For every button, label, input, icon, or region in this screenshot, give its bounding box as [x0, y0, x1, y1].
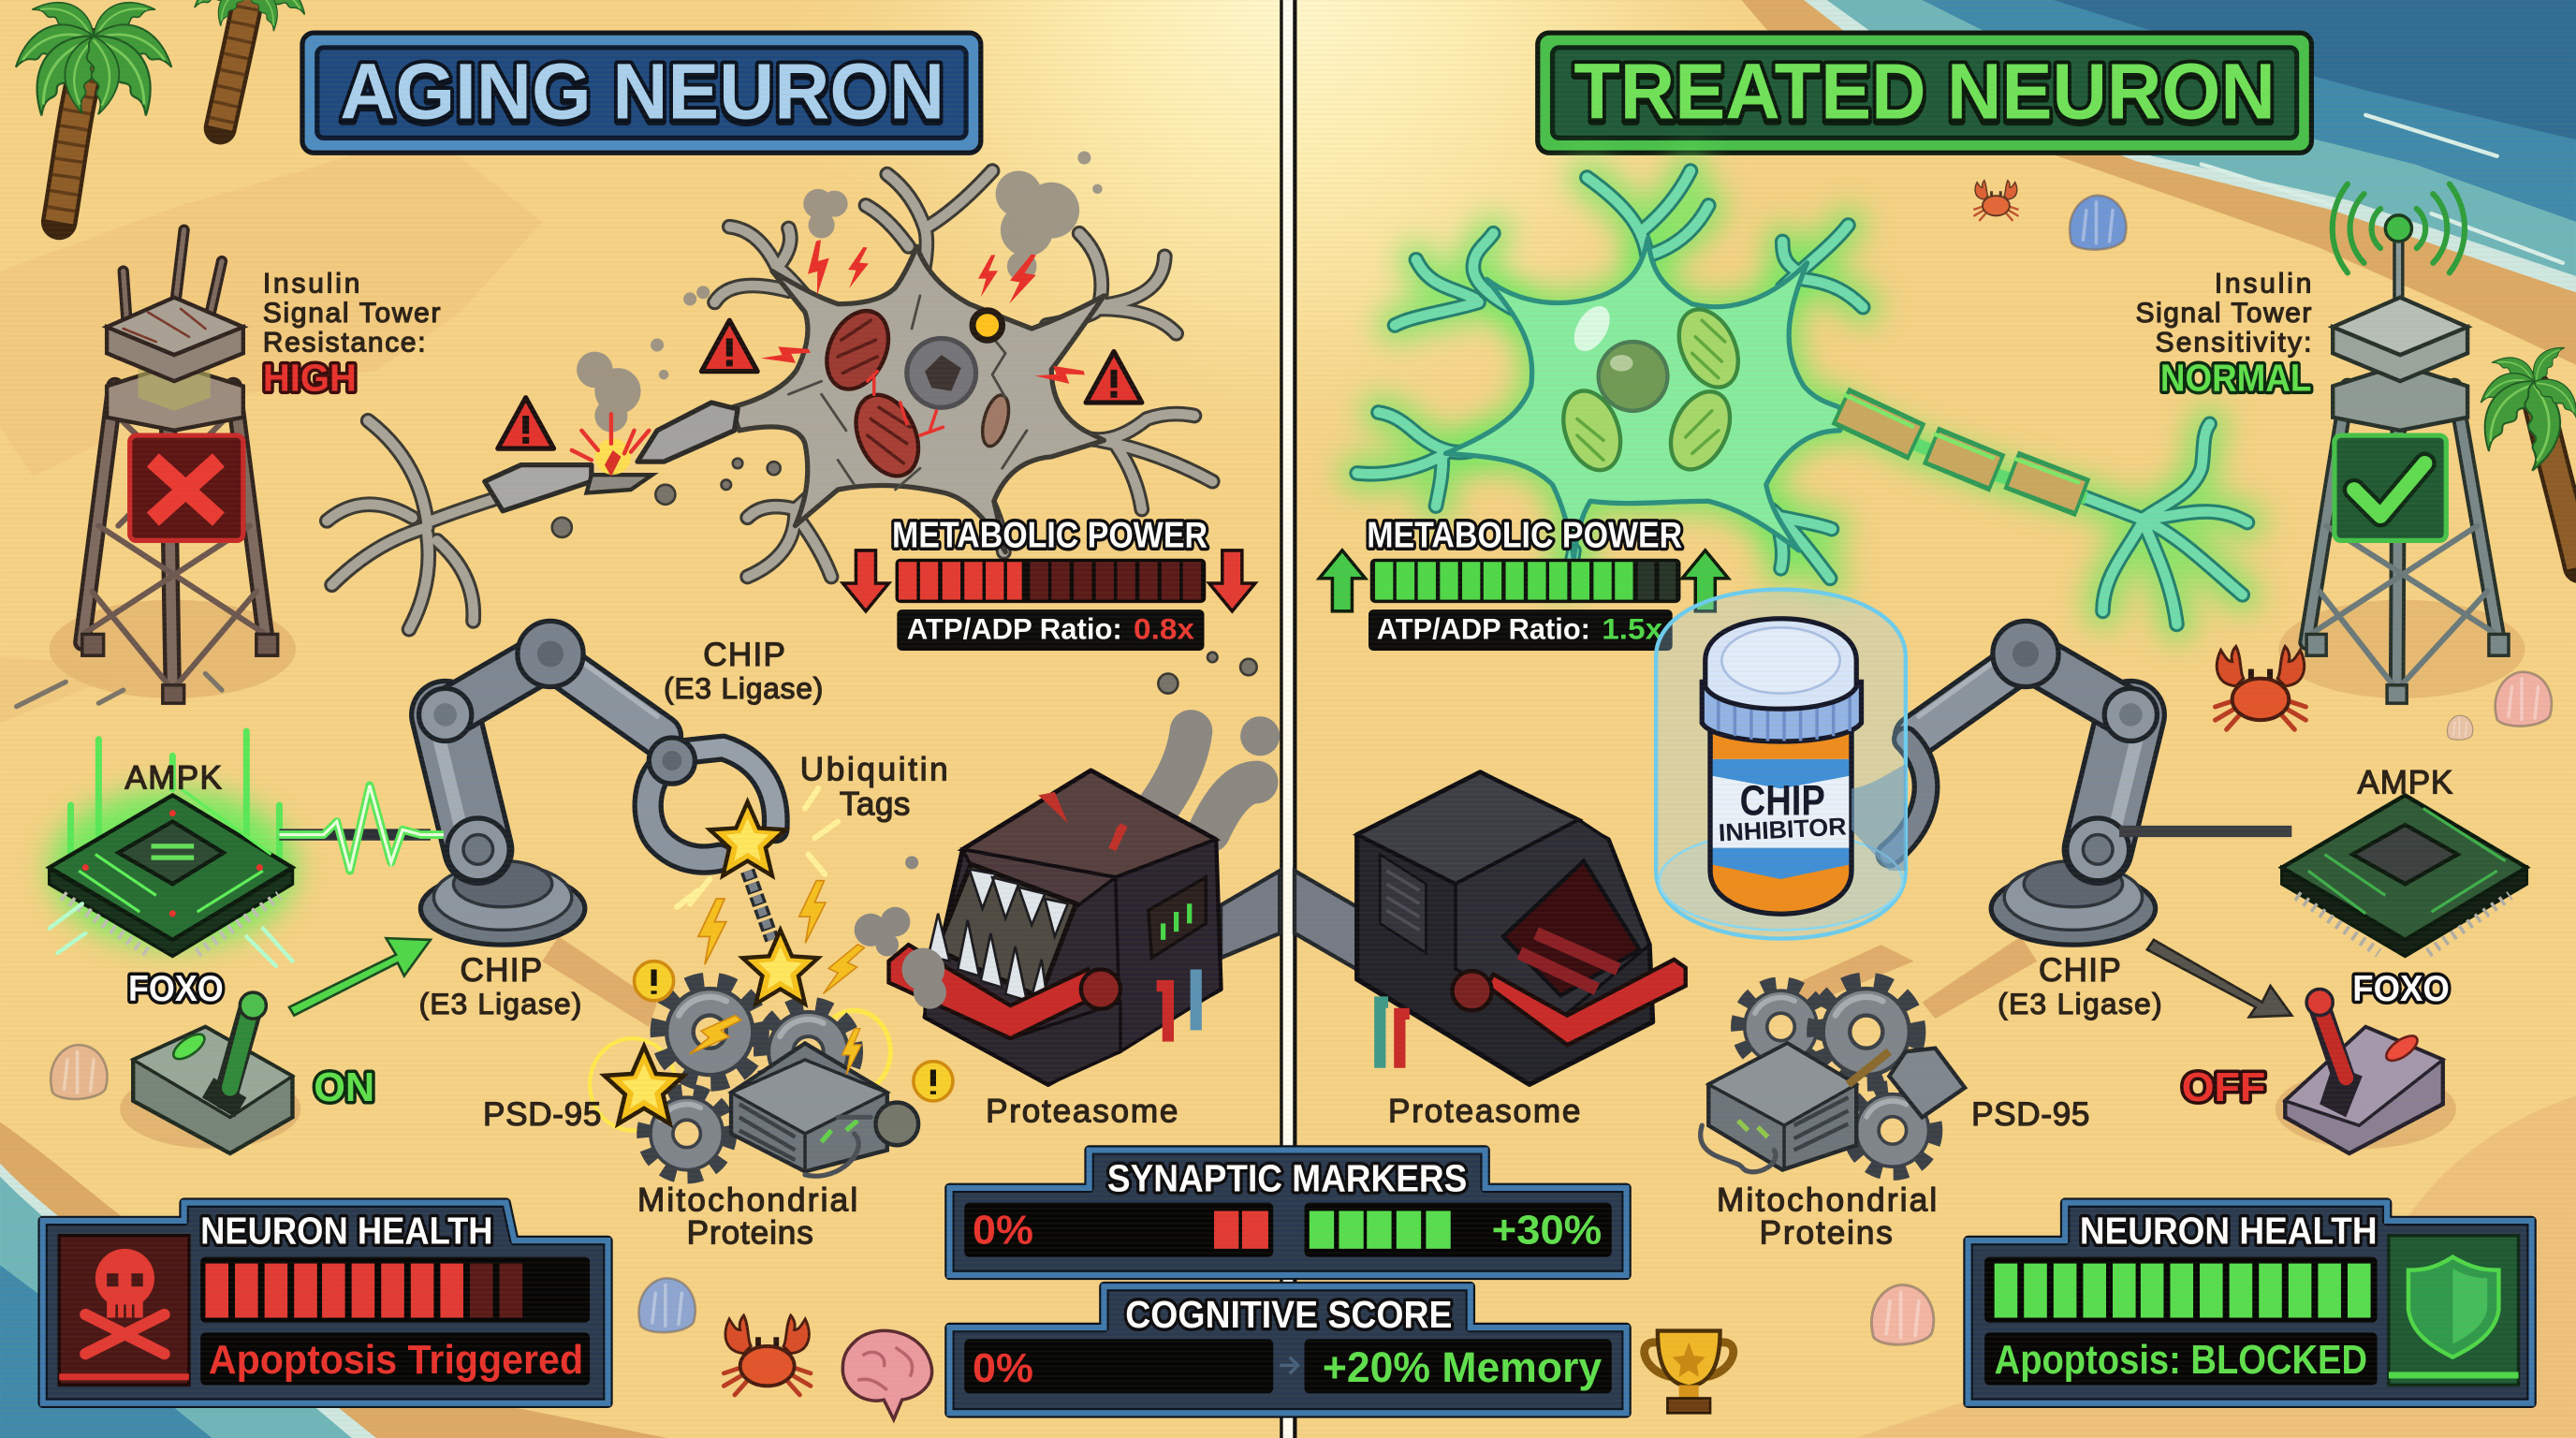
label: PSD-95 right: PSD-95 — [1971, 1096, 2089, 1133]
robot arm: CHIP blocked — [1889, 621, 2157, 1019]
FOXO switch: off — [2276, 990, 2456, 1153]
label: CHIP (upper left): CHIP — [703, 637, 785, 673]
metabolic power: aging: 0.8x — [1134, 612, 1194, 646]
label: insulin signal tower sensitivity: Sensitivity: — [2156, 328, 2311, 359]
proteasome: open — [1295, 772, 1686, 1084]
panel: neuron health treated: Apoptosis: BLOCKED — [1995, 1337, 2367, 1383]
arrow: CHIP to FOXO — [2147, 940, 2291, 1017]
label: FOXO off: OFF — [2182, 1064, 2265, 1110]
insulin tower: damaged — [17, 230, 296, 707]
label: insulin signal tower resistance: Insulin — [263, 268, 359, 299]
icon: brain — [842, 1330, 932, 1419]
palm tree: right — [2467, 339, 2576, 566]
damaged proteins pile — [590, 788, 953, 1176]
panel: synaptic markers — [949, 1151, 1627, 1275]
label: FOXO off — [2182, 969, 2450, 1110]
label: insulin signal tower resistance: Resistance: — [263, 328, 426, 359]
icons: shells — [51, 196, 2552, 1344]
AMPK chip: active — [50, 731, 296, 966]
label: proteasome right: Proteasome — [1388, 1093, 1580, 1130]
icon: crab right — [2216, 646, 2305, 729]
panel: cognitive score — [949, 1286, 1627, 1413]
metabolic power: treated: METABOLIC POWER — [1367, 515, 1682, 555]
panel: neuron health treated — [1969, 1203, 2532, 1403]
label: mitochondrial proteins right: Mitochondrial — [1717, 1181, 1937, 1218]
label: FOXO on — [128, 969, 374, 1110]
proteins pile: intact — [1701, 945, 1965, 1172]
FOXO switch: on — [120, 992, 300, 1153]
label: insulin signal tower resistance: HIGH — [263, 357, 357, 400]
metabolic power: aging: METABOLIC POWER — [892, 515, 1208, 555]
pill bottle in glass case: INHIBITOR — [1718, 812, 1847, 847]
metabolic power: aging — [842, 515, 1255, 651]
label: ubiquitin tags: Tags — [840, 785, 910, 822]
signal line: dead AMPK link — [2119, 829, 2291, 835]
metabolic power: treated: ATP/ADP Ratio: — [1377, 612, 1590, 646]
title: aging neuron: AGING NEURON — [340, 47, 944, 135]
label: mitochondrial proteins left: Proteins — [687, 1215, 813, 1252]
label: CHIP (upper left): (E3 Ligase) — [664, 671, 823, 705]
label: mitochondrial proteins left — [637, 1181, 857, 1252]
label: FOXO off: FOXO — [2352, 969, 2450, 1009]
AMPK chip: inactive — [2282, 795, 2526, 956]
label: insulin signal tower resistance: Signal Tower — [263, 298, 440, 329]
label: ubiquitin tags — [800, 752, 948, 822]
label: insulin signal tower resistance — [263, 268, 440, 400]
panel: neuron health aging: NEURON HEALTH — [200, 1210, 493, 1253]
robot arm: CHIP active — [419, 621, 776, 1027]
label: FOXO on: FOXO — [128, 969, 224, 1009]
icon: small crab top — [1974, 181, 2018, 220]
signal line: AMPK to CHIP with pulse — [279, 785, 444, 871]
label: CHIP (lower left): CHIP — [460, 952, 542, 989]
panel: synaptic markers: SYNAPTIC MARKERS — [1107, 1156, 1467, 1199]
ocean: bottom left — [0, 1123, 674, 1438]
icon: trophy — [1645, 1331, 1734, 1413]
pill bottle in glass case — [1656, 590, 1906, 939]
panel: cognitive score: 0% — [973, 1345, 1033, 1391]
label: AMPK inactive: AMPK — [2358, 765, 2453, 801]
icon: shield — [2389, 1236, 2519, 1385]
label: insulin signal tower sensitivity — [2136, 268, 2311, 400]
panel: synaptic markers: 0% — [973, 1208, 1033, 1254]
panel: neuron health aging: Apoptosis Triggered — [209, 1337, 583, 1383]
metabolic power: treated: 1.5x — [1602, 612, 1663, 646]
panel: neuron health treated: NEURON HEALTH — [2080, 1210, 2378, 1253]
label: mitochondrial proteins right — [1717, 1181, 1937, 1252]
label: CHIP right: CHIP — [2039, 952, 2121, 989]
title: treated neuron — [1538, 33, 2311, 153]
arrow: FOXO to CHIP — [289, 938, 431, 1016]
palm tree: top left — [7, 0, 181, 222]
ocean: top right — [1741, 0, 2576, 365]
proteasome: chewing — [855, 716, 1280, 1084]
label: AMPK active: AMPK — [124, 759, 223, 796]
panel: synaptic markers: +30% — [1492, 1208, 1602, 1254]
panel: cognitive score: COGNITIVE SCORE — [1125, 1293, 1453, 1336]
icon: skull and crossbones — [59, 1236, 189, 1385]
label: CHIP right: (E3 Ligase) — [1998, 987, 2162, 1020]
label: insulin signal tower sensitivity: Insulin — [2215, 268, 2311, 299]
palm tree: second top left — [188, 0, 313, 128]
label: CHIP (upper left) — [664, 637, 823, 705]
label: CHIP (lower left): (E3 Ligase) — [419, 987, 581, 1020]
label: FOXO on: ON — [314, 1064, 374, 1110]
panel: cognitive score: +20% Memory — [1323, 1343, 1603, 1391]
icon: crab near brain — [724, 1315, 811, 1395]
healthy glowing neuron — [1357, 171, 2247, 624]
label: CHIP (lower left) — [419, 952, 581, 1020]
label: insulin signal tower sensitivity: Signal Tower — [2136, 298, 2311, 329]
label: mitochondrial proteins right: Proteins — [1760, 1215, 1893, 1252]
damaged neuron — [327, 151, 1257, 694]
metabolic power: treated — [1319, 515, 1728, 651]
insulin tower: healthy — [2278, 184, 2525, 703]
label: insulin signal tower sensitivity: NORMAL — [2160, 357, 2311, 400]
label: PSD-95 left: PSD-95 — [483, 1096, 601, 1133]
title: treated neuron: TREATED NEURON — [1573, 47, 2276, 135]
pill bottle in glass case: CHIP — [1740, 776, 1825, 824]
panel: neuron health aging — [43, 1203, 607, 1403]
label: CHIP right — [1998, 952, 2162, 1020]
label: proteasome left: Proteasome — [986, 1093, 1178, 1130]
smoke clouds over damaged neuron — [577, 151, 1103, 433]
label: mitochondrial proteins left: Mitochondrial — [637, 1181, 857, 1218]
title: aging neuron — [302, 33, 981, 153]
center divider — [1280, 0, 1296, 1438]
metabolic power: aging: ATP/ADP Ratio: — [907, 612, 1122, 646]
label: ubiquitin tags: Ubiquitin — [800, 752, 948, 788]
